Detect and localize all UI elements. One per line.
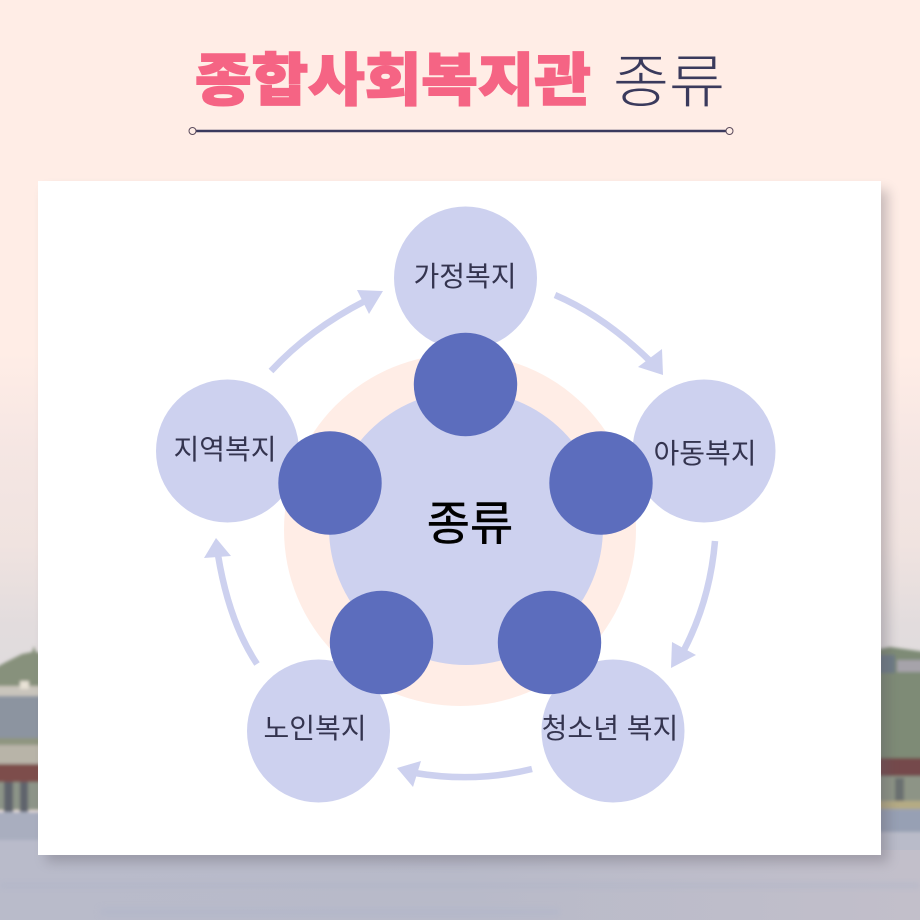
left shore hill xyxy=(0,646,44,700)
node: 청소년 복지 xyxy=(542,660,684,802)
title: light navy: 종류 xyxy=(613,35,725,119)
left water xyxy=(0,812,45,920)
node: 지역복지 xyxy=(156,380,299,522)
dark dot: lower right xyxy=(498,591,601,694)
lavender center disc xyxy=(329,391,603,665)
arrow: lower right to lower left xyxy=(397,761,532,787)
white card shadow xyxy=(46,190,888,862)
right water xyxy=(875,809,920,920)
node: 노인복지 xyxy=(247,660,390,802)
label: 아동복지: 아동복지 xyxy=(653,432,757,472)
dark dot: lower left xyxy=(330,591,433,694)
arrow: top to right xyxy=(555,295,663,375)
dark dot: right xyxy=(549,431,653,535)
right bridge xyxy=(875,758,920,776)
title: bold pink: 종합사회복지관 xyxy=(195,35,591,117)
node: 아동복지 xyxy=(632,380,776,522)
peach center ring xyxy=(284,354,636,706)
arrow: right to lower right xyxy=(671,541,715,668)
label: 청소년 복지: 청소년 복지 xyxy=(542,707,678,747)
water: bottom band xyxy=(0,850,920,920)
arrow: left to top xyxy=(271,290,383,371)
left shore buildings xyxy=(0,690,45,740)
label: 가정복지: 가정복지 xyxy=(413,255,517,295)
title xyxy=(195,35,725,119)
title underline with end dots xyxy=(189,128,733,134)
center label: 종류 xyxy=(427,485,513,554)
background: river photo strip xyxy=(0,646,920,920)
left bridge xyxy=(0,764,45,783)
label: 노인복지: 노인복지 xyxy=(263,707,367,747)
right shore trees xyxy=(875,647,920,760)
node: 가정복지 xyxy=(394,206,537,350)
dark dot: top xyxy=(414,333,517,436)
dark dot: left xyxy=(278,431,382,535)
panel: white card xyxy=(38,181,881,855)
background: peach gradient sky xyxy=(0,0,920,680)
label: 지역복지: 지역복지 xyxy=(173,428,277,468)
cycle diagram xyxy=(156,206,776,802)
arrow: lower left to left xyxy=(204,538,257,664)
